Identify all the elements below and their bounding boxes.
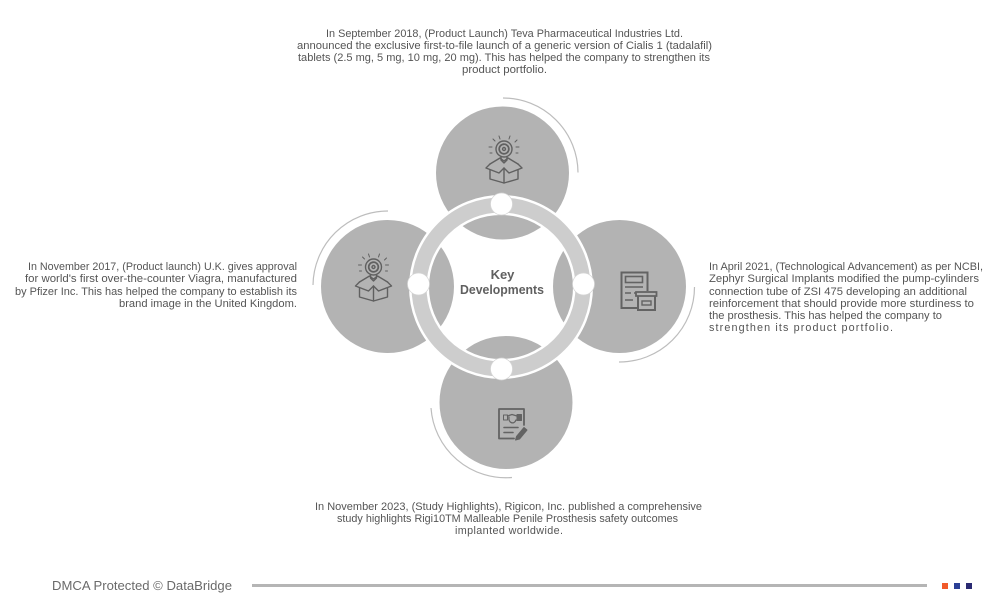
text block: right: reinforcement that should provide more sturdiness to <box>709 298 974 310</box>
text block: left <box>15 261 298 310</box>
center heading: Developments <box>460 282 544 297</box>
circle: left <box>321 220 454 353</box>
icon: agreement document, bottom <box>499 409 527 440</box>
footer <box>52 578 972 593</box>
text block: right <box>709 261 983 334</box>
text block: right: strengthen its product portfolio. <box>709 322 893 334</box>
center heading: Key <box>491 267 515 282</box>
center heading <box>460 267 544 297</box>
text block: top <box>297 28 712 76</box>
text block: right: In April 2021, (Technological Advancement) as per NCBI, <box>709 261 983 273</box>
circle: top <box>436 106 569 240</box>
text block: top: product portfolio. <box>462 64 547 76</box>
text block: bottom: study highlights Rigi10TM Malleable Penile Prosthesis safety outcomes <box>337 513 679 525</box>
footer squares <box>942 583 972 589</box>
circle: bottom <box>440 336 572 469</box>
text block: right: Zephyr Surgical Implants modified the pump-cylinders <box>709 273 980 285</box>
arc: left <box>313 211 388 285</box>
text block: bottom: In November 2023, (Study Highlights), Rigicon, Inc. published a comprehensive <box>315 501 702 513</box>
text block: right: connection tube of ZSI 475 developing an additional <box>709 286 967 298</box>
footer bar <box>252 584 927 587</box>
text block: left: by Pfizer Inc. This has helped the company to establish its <box>15 286 298 298</box>
ring nodes <box>408 193 594 380</box>
arc: right <box>619 287 694 362</box>
text block: left: for world's first over-the-counter Viagra, manufactured <box>25 273 297 285</box>
text block: top: tablets (2.5 mg, 5 mg, 10 mg, 20 mg). This has helped the company to strengthen its <box>298 52 711 64</box>
circle: right <box>553 220 686 353</box>
icon: document and box, right <box>622 272 656 310</box>
central ring <box>419 205 583 369</box>
arc: bottom <box>431 408 512 478</box>
text block: left: In November 2017, (Product launch) U.K. gives approval <box>28 261 297 273</box>
text block: left: brand image in the United Kingdom. <box>119 298 297 310</box>
text block: top: In September 2018, (Product Launch) Teva Pharmaceutical Industries Ltd. <box>326 28 683 40</box>
text block: bottom <box>315 501 702 537</box>
text block: bottom: implanted worldwide. <box>455 525 563 537</box>
text block: top: announced the exclusive first-to-file launch of a generic version of Cialis 1 (tadalafil) <box>297 40 712 52</box>
arc: top <box>503 98 578 172</box>
icon: box with lightbulb, top <box>486 136 522 183</box>
text block: right: the prosthesis. This has helped the company to <box>709 310 942 322</box>
icon: box with lightbulb, left <box>356 254 392 301</box>
footer label: DMCA Protected © DataBridge <box>52 578 232 593</box>
